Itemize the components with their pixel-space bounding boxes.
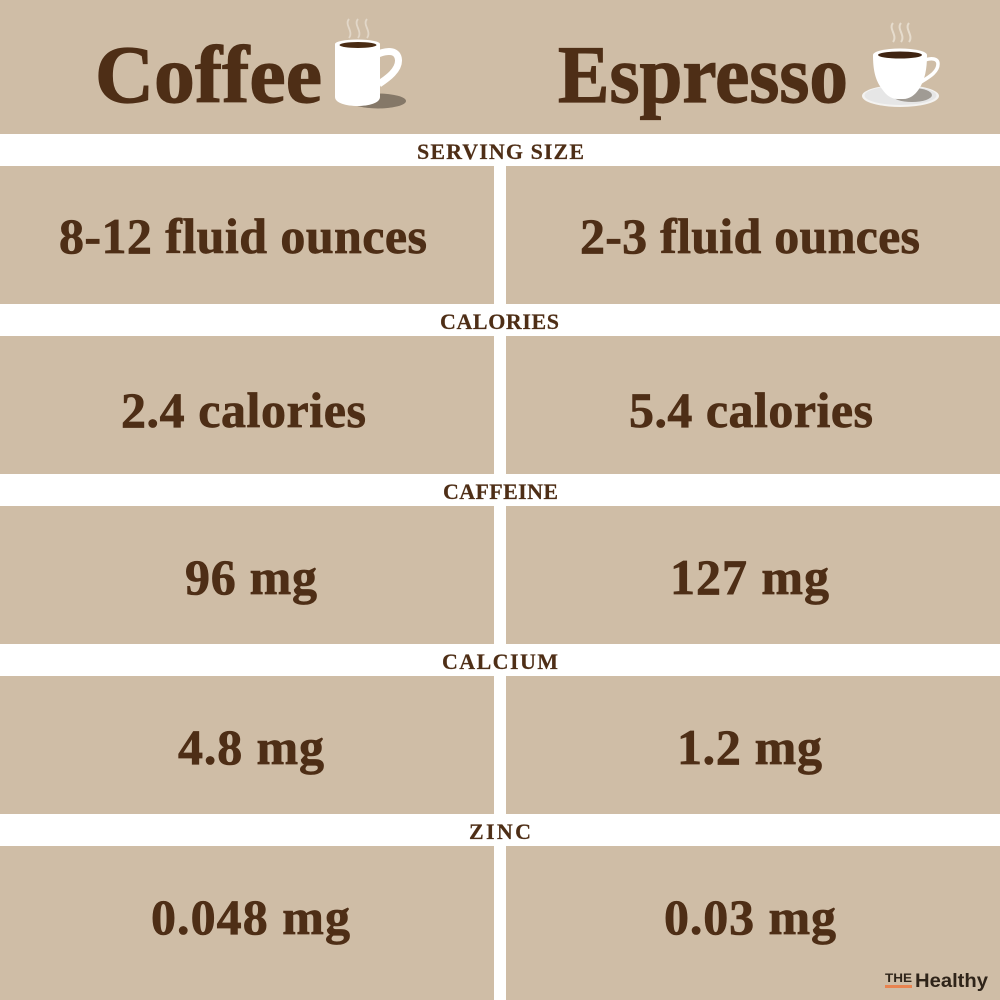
title: Coffee: Coffee [95, 29, 322, 120]
heading: calcium: CALCIUM [442, 649, 558, 674]
panel: serving size espresso [506, 166, 1000, 304]
value: espresso caffeine: 127 mg [670, 549, 829, 605]
logo: The Healthy [885, 971, 988, 992]
value: coffee calcium: 4.8 mg [178, 719, 324, 775]
panel: calories espresso [506, 336, 1000, 474]
logo: The Healthy: THE [885, 971, 912, 985]
panel: zinc coffee [0, 846, 494, 1000]
icon: espresso cup and saucer [862, 23, 939, 107]
heading: caffeine: CAFFEINE [443, 479, 558, 504]
panel: calories coffee [0, 336, 494, 474]
value: coffee zinc: 0.048 mg [151, 889, 350, 945]
heading: serving size: SERVING SIZE [417, 139, 584, 164]
panel: zinc espresso [506, 846, 1000, 1000]
value: espresso serving size: 2-3 fluid ounces [580, 208, 920, 264]
header band [0, 0, 1000, 134]
icon: coffee mug [335, 19, 406, 108]
panel: calcium espresso [506, 676, 1000, 814]
panel: caffeine espresso [506, 506, 1000, 644]
title: Espresso: Espresso [558, 29, 848, 120]
panel: serving size coffee [0, 166, 494, 304]
value: coffee caffeine: 96 mg [185, 549, 317, 605]
panel: calcium coffee [0, 676, 494, 814]
value: coffee calories: 2.4 calories [121, 382, 366, 438]
value: espresso calcium: 1.2 mg [677, 719, 822, 775]
value: espresso calories: 5.4 calories [629, 382, 873, 438]
panel: caffeine coffee [0, 506, 494, 644]
heading: calories: CALORIES [440, 309, 559, 334]
heading: zinc: ZINC [469, 819, 531, 844]
logo: The Healthy: Healthy [915, 971, 988, 992]
value: coffee serving size: 8-12 fluid ounces [59, 208, 427, 264]
value: espresso zinc: 0.03 mg [664, 889, 836, 945]
